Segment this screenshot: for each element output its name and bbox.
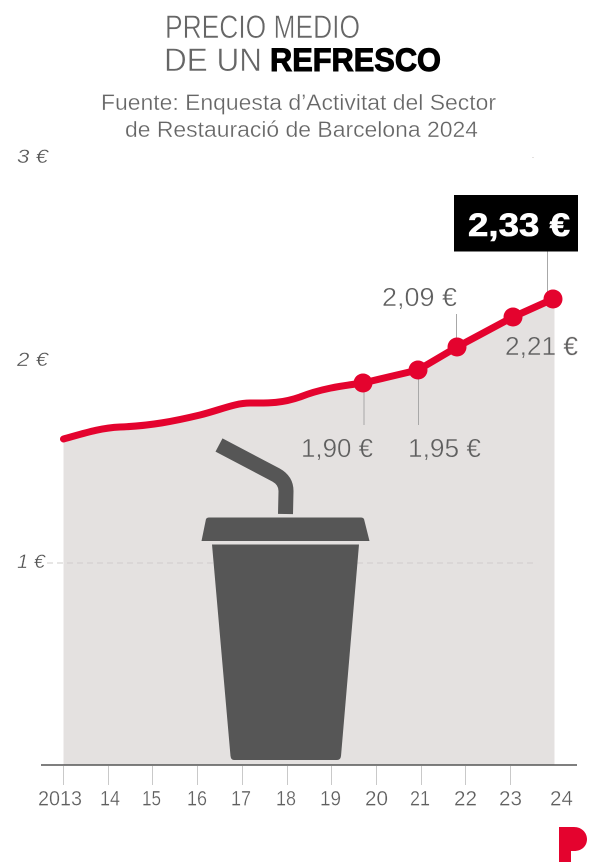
source subtitle: Fuente: Enquesta d’Activitat del Sector — [101, 90, 496, 115]
x axis year labels: 22 — [454, 788, 477, 810]
x axis year labels: 24 — [550, 788, 573, 810]
title: DE UN — [164, 42, 262, 78]
y axis labels: 2 € — [16, 350, 50, 371]
callout: 2024 price — [454, 195, 578, 252]
value labels: 1,90 € — [301, 433, 374, 463]
x axis year labels: 20 — [365, 788, 388, 810]
x axis year labels: 14 — [100, 788, 120, 810]
data points — [354, 290, 562, 392]
x axis year labels: 18 — [276, 788, 296, 810]
x axis year labels: 19 — [320, 788, 341, 810]
icon: cup body — [212, 544, 359, 760]
source subtitle: de Restauració de Barcelona 2024 — [125, 117, 478, 142]
title — [164, 9, 441, 78]
title: REFRESCO — [270, 42, 441, 78]
value labels: 2,09 € — [382, 282, 458, 312]
x axis — [41, 765, 577, 785]
icon: cup lid — [202, 518, 370, 541]
y axis labels — [16, 147, 50, 573]
x axis year labels: 15 — [142, 788, 161, 810]
icon: soft drink cup — [202, 445, 370, 760]
x axis year labels: 2013 — [38, 788, 82, 810]
y axis gridline at 1 euro — [47, 562, 535, 564]
price line — [64, 299, 553, 439]
x axis year labels: 17 — [231, 788, 251, 810]
leader lines — [364, 251, 548, 425]
area under the line — [64, 299, 554, 765]
x axis year labels: 16 — [187, 788, 207, 810]
value labels: 1,95 € — [408, 433, 482, 463]
icon: publisher logo P — [559, 827, 587, 862]
title: PRECIO MEDIO — [165, 9, 360, 45]
callout: 2024 price: 2,33 € — [468, 207, 570, 243]
y axis labels: 1 € — [17, 552, 47, 573]
y axis labels: 3 € — [17, 147, 50, 168]
x axis year labels: 23 — [499, 788, 522, 810]
value labels: 2,21 € — [505, 331, 579, 361]
x axis year labels: 21 — [410, 788, 430, 810]
value labels — [301, 282, 579, 463]
y axis top marker — [532, 157, 534, 158]
x axis year labels — [38, 788, 573, 810]
icon: straw — [219, 445, 286, 514]
source subtitle — [101, 90, 496, 142]
